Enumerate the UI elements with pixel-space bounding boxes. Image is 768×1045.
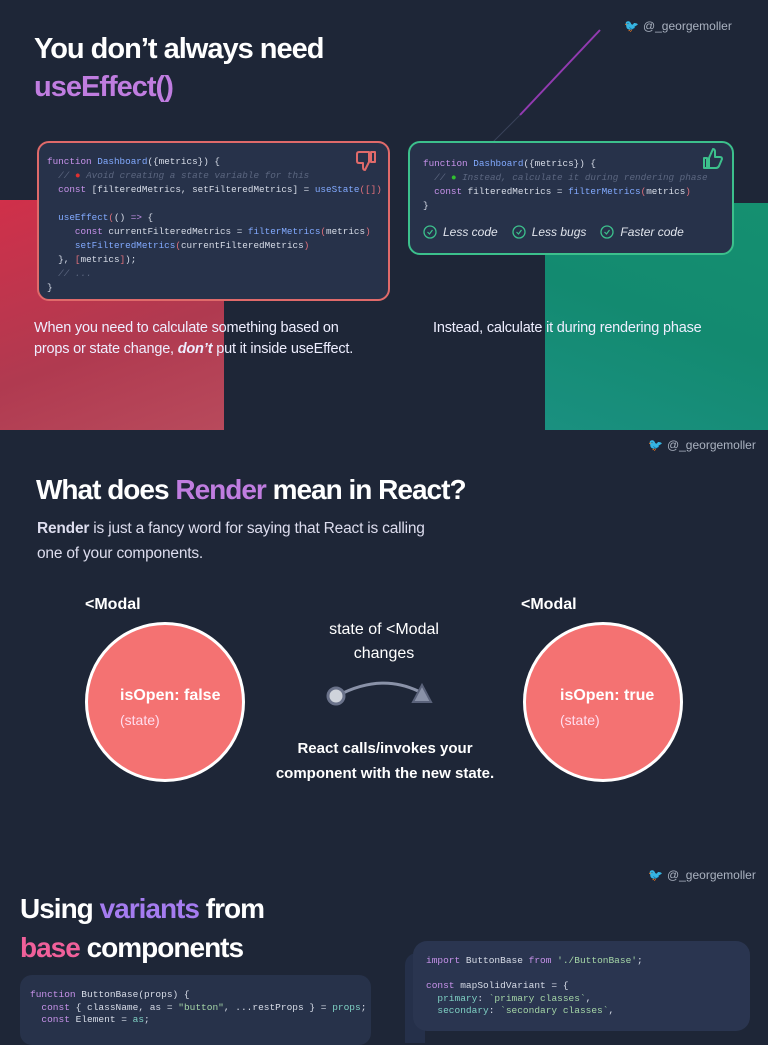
label: Modal right: <Modal: [521, 596, 577, 613]
code block: bad: function Dashboard({metrics}) { // ● Avoid creating a state variable for this const [filteredMetrics, setFilteredMetrics] = useState([]) useEffect(() => { const currentFilteredMetrics = filterMetrics(metrics) setFilteredMetrics(currentFilteredMetrics) }, [metrics]); // ... }: [47, 156, 382, 293]
label: state changes: state of <Modal: [329, 621, 439, 638]
title 2: What does Render mean in React?: [36, 474, 466, 505]
text: render description: [37, 520, 425, 562]
title 1: You don’t always need: [34, 33, 323, 65]
circle: isOpen true: [523, 622, 683, 782]
text: bad explanation: [34, 320, 353, 357]
circle: isOpen false: (state): [120, 712, 160, 728]
panel: variants code (stacked): [405, 941, 750, 1043]
title 1: [34, 33, 323, 103]
twitter handle 3: 🐦: [648, 868, 663, 882]
text: good explanation: Instead, calculate it during rendering phase: [433, 320, 702, 336]
text: render description: one of your components.: [37, 545, 203, 562]
circle: isOpen true: isOpen: true: [560, 687, 654, 704]
background: red block: [0, 200, 224, 430]
circle: isOpen false: [85, 622, 245, 782]
benefits list: Less code: [443, 225, 498, 239]
panel: base code: [20, 975, 371, 1045]
code block: good: function Dashboard({metrics}) { // ● Instead, calculate it during rendering phase const filteredMetrics = filterMetrics(metrics) }: [423, 158, 708, 211]
panel: bad code: [37, 141, 390, 301]
benefits list: Less bugs: [532, 225, 586, 239]
icon: thumbs down: [356, 151, 376, 171]
code block: ButtonBase: function ButtonBase(props) { const { className, as = "button", ...restProps } = props; const Element = as;: [30, 989, 366, 1025]
title 3: [20, 893, 264, 963]
diagram: render: [85, 596, 683, 782]
twitter handle 1: @_georgemoller: [643, 19, 732, 33]
label: react calls: React calls/invokes your: [297, 740, 473, 757]
label: Modal left: <Modal: [85, 596, 141, 613]
circle: isOpen true: (state): [560, 712, 600, 728]
code block: variants: import ButtonBase from './ButtonBase'; const mapSolidVariant = { primary: `primary classes`, secondary: `secondary classes`,: [426, 955, 643, 1016]
text: render description: Render is just a fancy word for saying that React is calling: [37, 520, 425, 537]
twitter handle 2: 🐦: [648, 438, 663, 452]
text: bad explanation: When you need to calculate something based on: [34, 320, 339, 336]
background: green block: [545, 203, 768, 430]
title 3: Using variants from: [20, 893, 264, 924]
twitter handle 2: @_georgemoller: [667, 438, 756, 452]
circle: isOpen false: isOpen: false: [120, 687, 220, 704]
benefits list: Faster code: [620, 225, 684, 239]
icon: thumbs up: [703, 148, 723, 169]
title 3: base components: [20, 932, 243, 963]
label: react calls: component with the new state.: [276, 765, 494, 782]
label: react calls: [276, 740, 494, 782]
benefits list: [423, 225, 684, 239]
twitter handle 1: 🐦: [624, 19, 639, 33]
label: state changes: [329, 621, 439, 662]
text: bad explanation: props or state change, don’t put it inside useEffect.: [34, 341, 353, 357]
panel: good code: [408, 141, 734, 255]
twitter handle 3: @_georgemoller: [667, 868, 756, 882]
title 1: useEffect(): [34, 71, 173, 103]
decorative streak: [494, 30, 601, 141]
arrow: [326, 682, 432, 706]
label: state changes: changes: [354, 645, 414, 662]
